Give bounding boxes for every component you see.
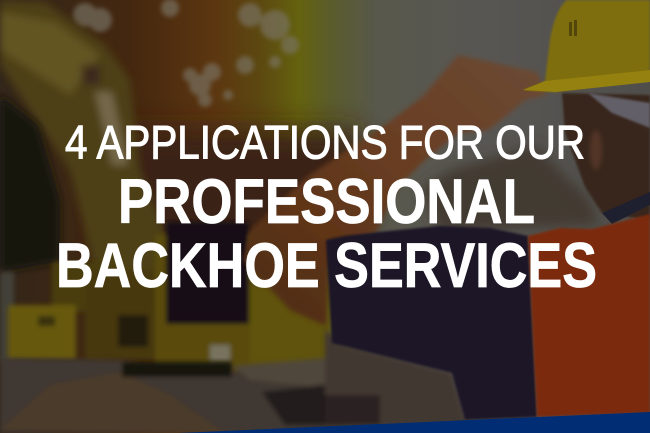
excavator cab window (0, 95, 60, 272)
navy sleeve (326, 226, 537, 420)
hard hat (523, 0, 650, 92)
excavator boom (0, 0, 190, 290)
worker head (562, 93, 650, 220)
worker forearm and hand (243, 55, 547, 326)
title line 2: PROFESSIONAL (118, 167, 535, 237)
left gravel (0, 272, 14, 362)
worker background rubble blur (420, 145, 600, 232)
sunlight bokeh (73, 0, 299, 107)
blue footer wedge (178, 412, 650, 433)
hard hat liner (588, 93, 650, 128)
orange safety vest (528, 214, 650, 417)
worker (243, 0, 650, 420)
ground rubble (0, 330, 467, 433)
title (56, 116, 597, 301)
navy collar (602, 192, 650, 224)
ear (590, 130, 602, 170)
excavator body (8, 222, 330, 370)
